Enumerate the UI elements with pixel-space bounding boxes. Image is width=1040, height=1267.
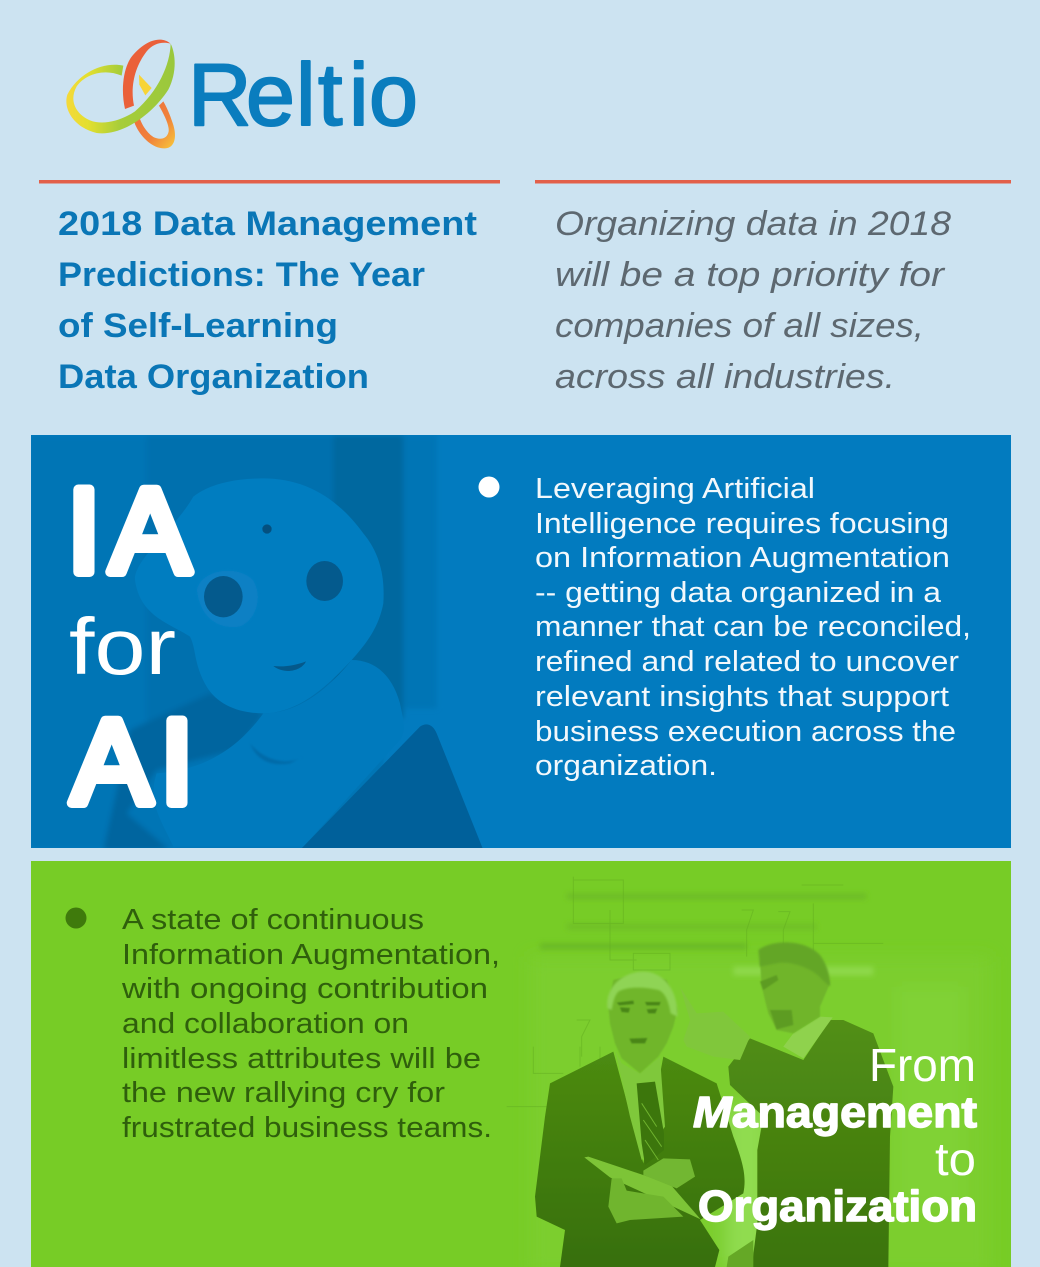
icon: interlocking rings: [66, 40, 175, 148]
left man hand under tablet: [608, 1178, 683, 1223]
panel title: From Management to Organization: From: [869, 1039, 976, 1091]
robot eye right: [306, 561, 343, 601]
photo: left man: [535, 972, 745, 1267]
body text: relevant insights that support: [535, 681, 949, 713]
left man tie: [637, 1082, 664, 1165]
divider: right: [535, 180, 1011, 184]
robot body: [154, 660, 402, 782]
right man shirt: [783, 1017, 833, 1058]
left man hair: [607, 972, 677, 1017]
body text: the new rallying cry for: [122, 1077, 445, 1109]
body text: on Information Augmentation: [535, 542, 950, 574]
photo: robot: [30, 435, 483, 850]
robot forehead sensor: [262, 524, 272, 534]
robot head: [135, 478, 384, 713]
intro text: will be a top priority for: [555, 256, 946, 294]
body text: -- getting data organized in a: [535, 577, 942, 609]
panel: From Management to Organization: [31, 861, 1011, 1267]
right man hair: [758, 942, 830, 987]
body text: limitless attributes will be: [122, 1043, 481, 1075]
intro text: [555, 205, 951, 396]
left man suit: [535, 1052, 745, 1267]
body text: and collaboration on: [122, 1008, 409, 1040]
photo: backdrop: [507, 877, 990, 1267]
bullet: [478, 476, 500, 498]
divider: left: [39, 180, 500, 184]
body text: organization.: [535, 750, 717, 782]
panel title: From Management to Organization: Management: [693, 1088, 977, 1137]
left man features: [617, 1001, 661, 1043]
body text: [121, 904, 500, 1144]
right man suit: [728, 1020, 893, 1267]
body text: Leveraging Artificial: [535, 473, 815, 505]
intro text: Organizing data in 2018: [555, 205, 951, 243]
panel title: IA for AI: for: [69, 602, 176, 691]
body text: business execution across the: [535, 716, 956, 748]
right man head: [760, 962, 829, 1034]
body text: refined and related to uncover: [535, 646, 959, 678]
heading: of Self-Learning: [58, 307, 338, 345]
robot tablet: [300, 724, 483, 850]
heading: 2018 Data Management: [58, 205, 477, 243]
robot mouth: [273, 661, 306, 671]
intro text: across all industries.: [555, 358, 895, 396]
heading: Data Organization: [58, 358, 369, 396]
heading: Predictions: The Year: [58, 256, 425, 294]
bullet: [66, 908, 86, 928]
left man hand on tablet: [643, 1158, 695, 1188]
left man head: [608, 973, 677, 1073]
panel title: From Management to Organization: [693, 1039, 977, 1231]
wordmark: Reltio: [188, 45, 418, 144]
body text: frustrated business teams.: [122, 1112, 492, 1144]
panel title: IA for AI: [67, 464, 194, 829]
logo: Reltio: [66, 40, 418, 148]
panel title: IA for AI: AI: [72, 695, 194, 829]
intro text: companies of all sizes,: [555, 307, 924, 345]
body text: Intelligence requires focusing: [535, 508, 949, 540]
body text: with ongoing contribution: [121, 973, 488, 1005]
left man shirt: [615, 1050, 665, 1160]
right man lower hand: [727, 1240, 753, 1267]
robot body shade: [252, 747, 293, 764]
body text: [535, 473, 971, 782]
body text: Information Augmentation,: [122, 939, 500, 971]
robot eye ring: [197, 571, 258, 627]
tablet: [584, 1157, 701, 1219]
body text: A state of continuous: [122, 904, 424, 936]
panel title: IA for AI: IA: [67, 464, 190, 598]
right man pointing hand: [680, 987, 750, 1060]
photo: right man: [680, 942, 893, 1267]
body text: manner that can be reconciled,: [535, 611, 971, 643]
panel title: From Management to Organization: Organization: [698, 1182, 977, 1231]
robot eye left: [204, 576, 243, 617]
panel: IA for AI: [30, 435, 1011, 850]
right man features: [760, 975, 793, 1029]
heading: [58, 205, 477, 396]
circuit lines: [507, 877, 883, 1107]
panel title: From Management to Organization: to: [935, 1133, 976, 1185]
